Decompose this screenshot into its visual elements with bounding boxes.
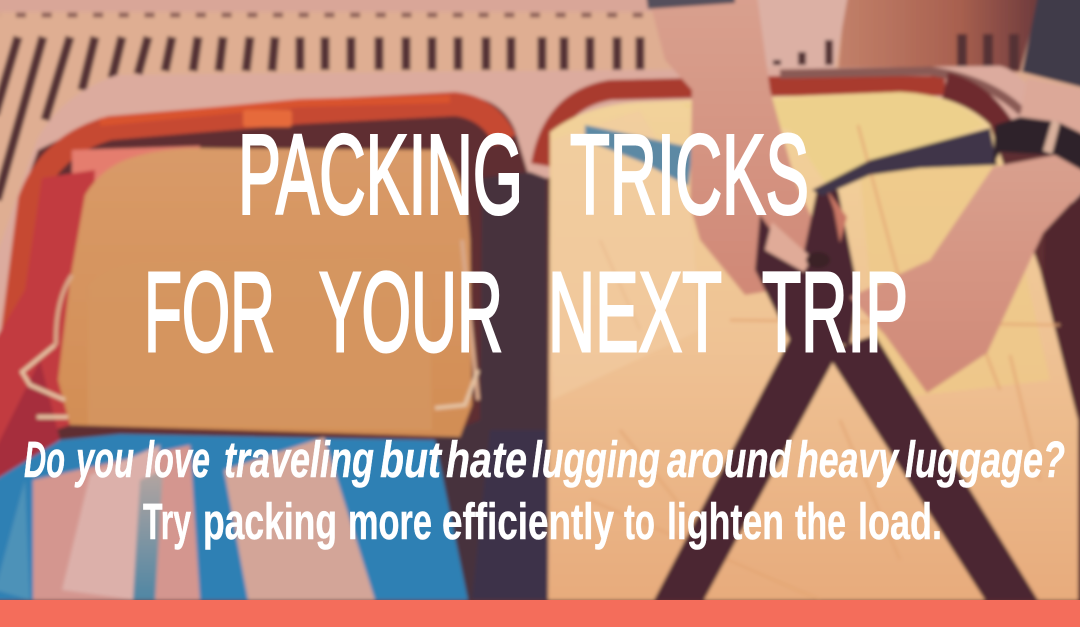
dark navy folded cloth — [432, 172, 549, 600]
subtitle statement: the — [795, 493, 846, 550]
blue strap flap — [585, 125, 693, 186]
title: YOUR — [319, 249, 503, 375]
dark sleeve — [1022, 0, 1080, 88]
title: NEXT — [548, 249, 722, 375]
tan travel pouch — [56, 148, 478, 437]
blue fabric — [0, 434, 468, 600]
subtitle statement: lighten — [667, 493, 784, 550]
wristwatch — [993, 117, 1080, 172]
left lid red rim — [12, 99, 505, 340]
navy strap pulled to the wrist — [812, 128, 997, 196]
italic subtitle question: Do — [24, 431, 65, 488]
subtitle statement: to — [624, 493, 655, 550]
left forearm and hand — [648, 0, 815, 295]
title: FOR — [144, 249, 275, 375]
crossing dark luggage straps — [654, 190, 1038, 600]
italic subtitle question: lugging — [532, 431, 660, 488]
italic subtitle question — [24, 431, 1065, 488]
italic subtitle question: traveling — [224, 431, 374, 488]
italic subtitle question: around — [667, 431, 792, 488]
yellow quilted jacket — [548, 92, 1078, 600]
pink and red clothing — [0, 146, 200, 500]
orange zipper pull — [243, 110, 292, 127]
subtitle statement — [143, 493, 942, 550]
right lid red rim — [541, 86, 945, 165]
subtitle statement: efficiently — [442, 493, 614, 550]
subtitle statement: load. — [858, 493, 942, 550]
italic subtitle question: but — [380, 431, 443, 488]
background arm — [838, 0, 1040, 72]
subtitle statement: packing — [203, 493, 337, 550]
subtitle statement: more — [348, 493, 432, 550]
title — [144, 112, 908, 375]
title: PACKING — [238, 112, 523, 238]
title: TRIP — [762, 249, 908, 375]
title: TRICKS — [570, 112, 809, 238]
right forearm and hand — [850, 155, 1080, 393]
dark lining beside right arm — [1040, 190, 1080, 500]
italic subtitle question: heavy — [797, 431, 900, 488]
finger and thumb over the strap — [765, 190, 847, 272]
italic subtitle question: love — [145, 431, 210, 488]
italic subtitle question: you — [74, 431, 134, 488]
flat travel documents and cards — [33, 437, 375, 600]
coral bottom band — [0, 600, 1080, 627]
pouch strings — [22, 345, 478, 417]
italic subtitle question: hate — [446, 431, 527, 488]
subtitle statement: Try — [143, 493, 191, 550]
